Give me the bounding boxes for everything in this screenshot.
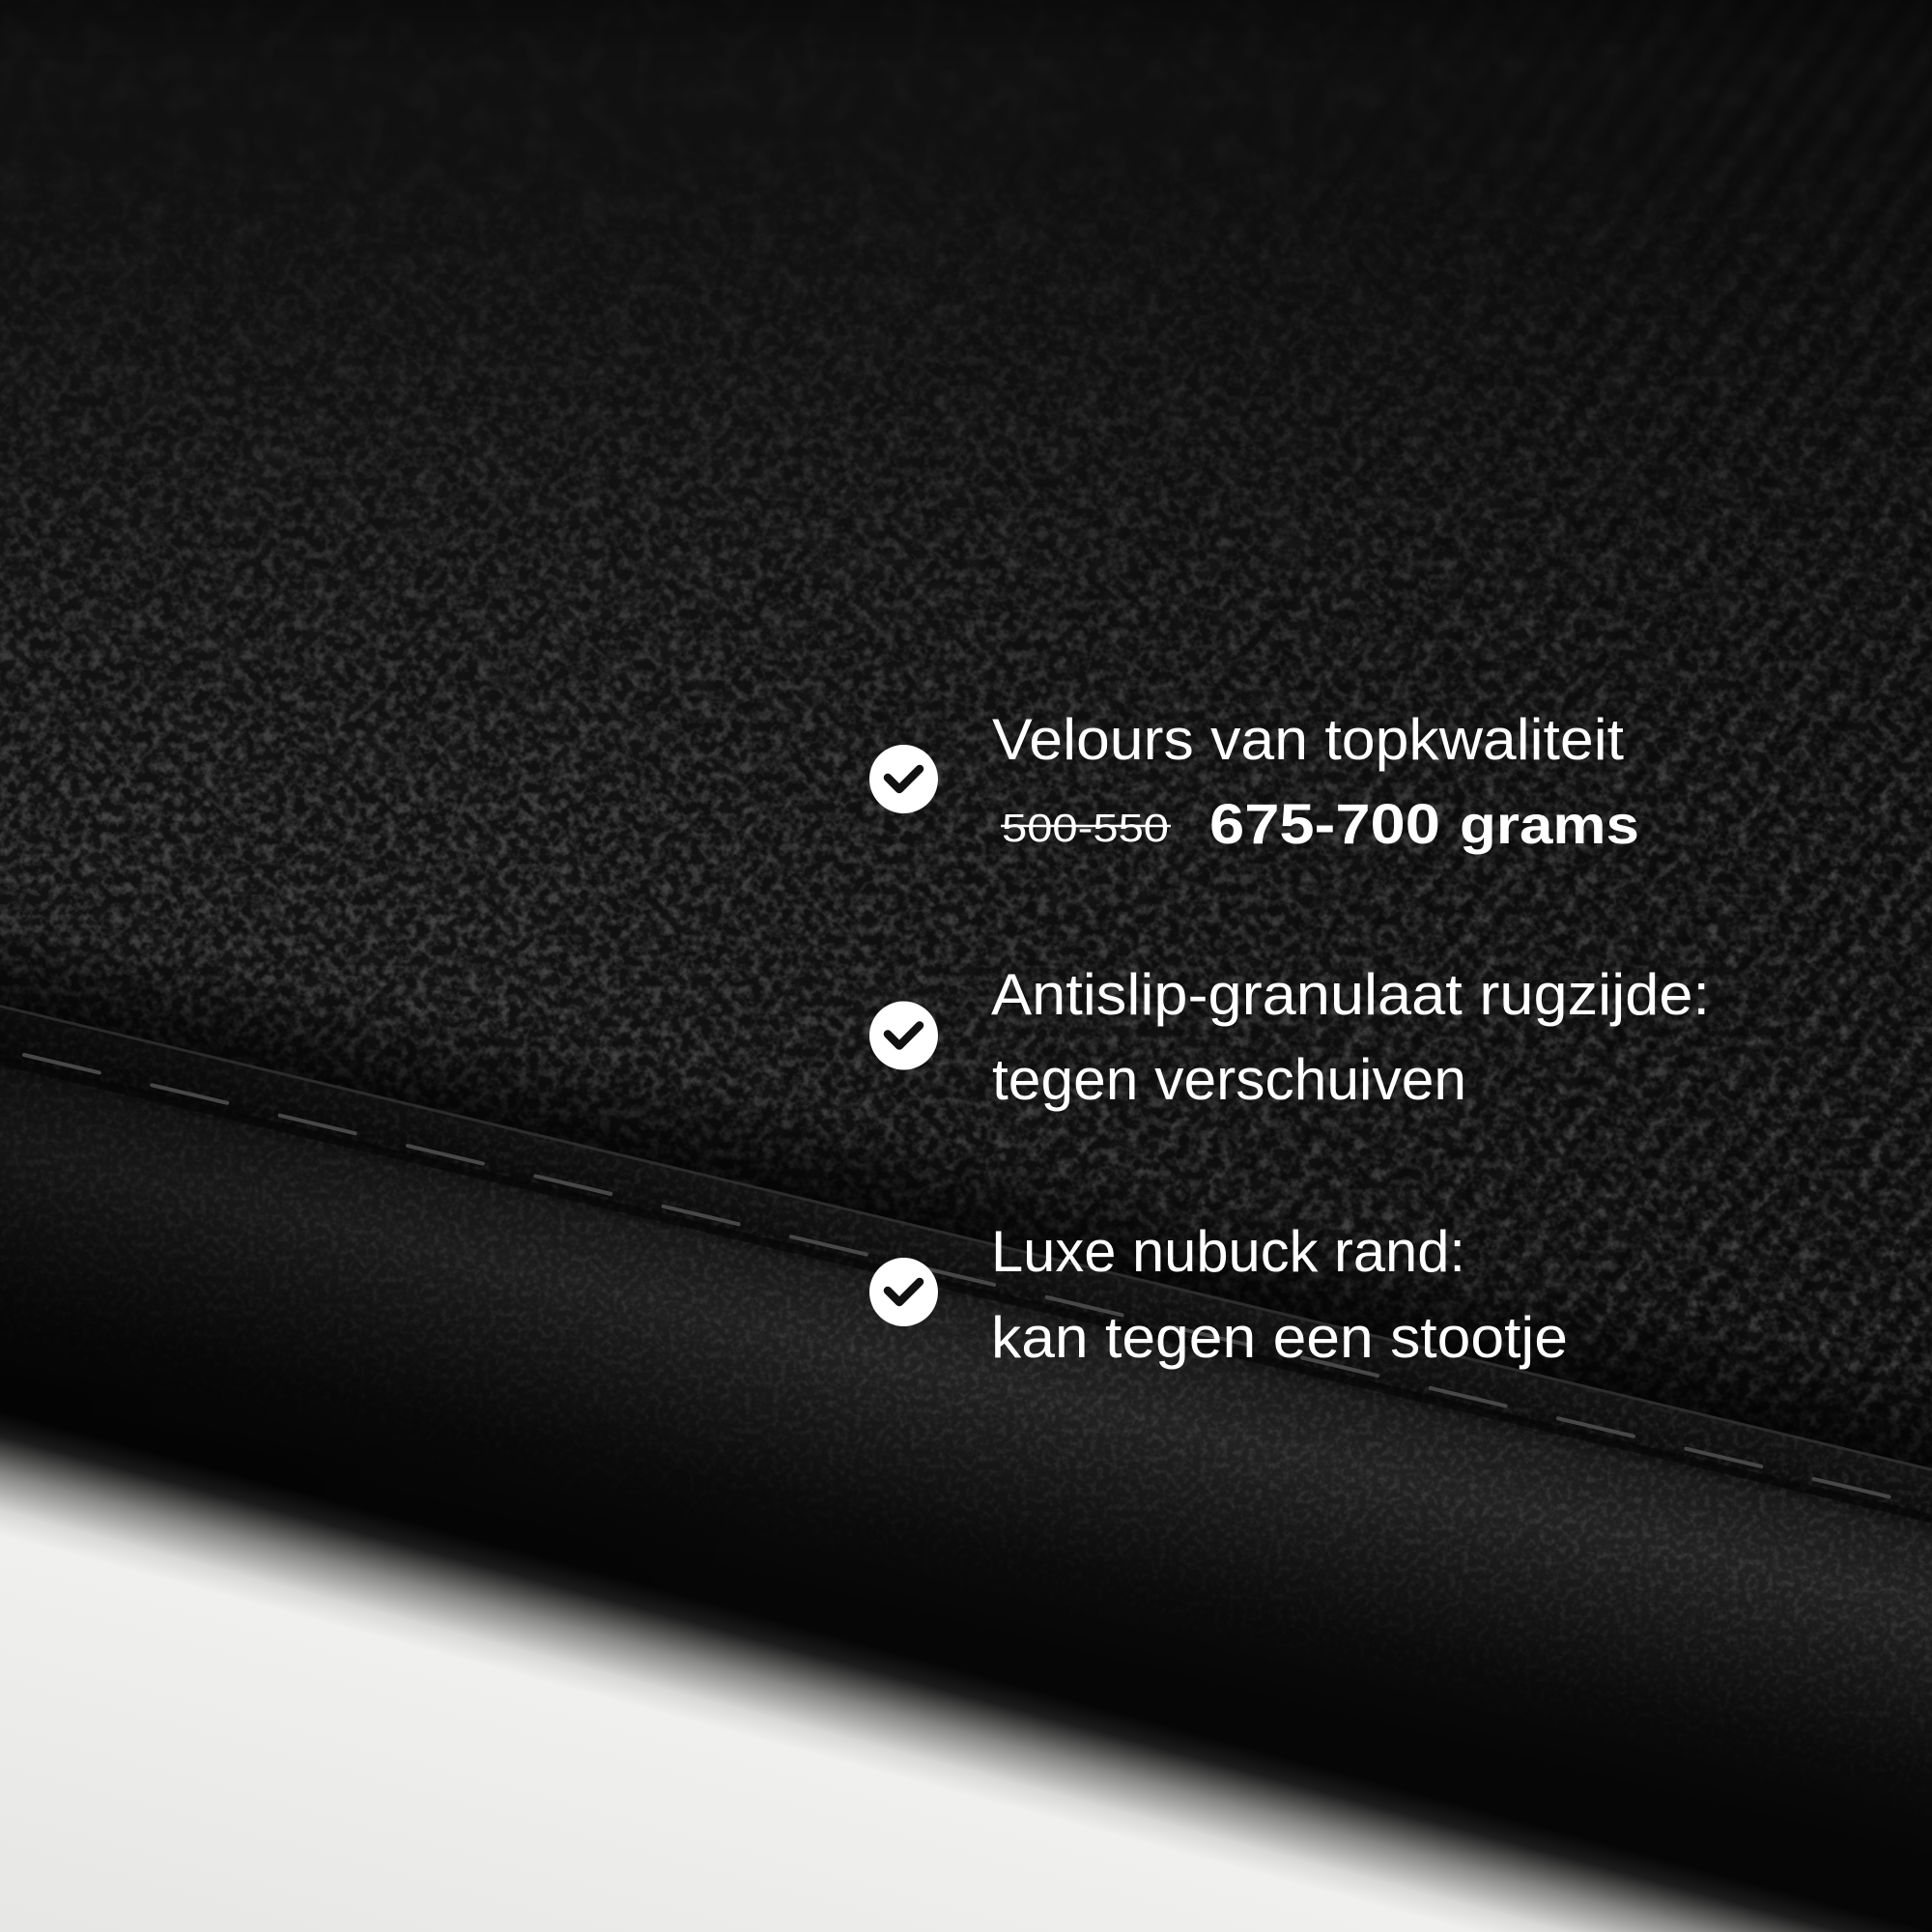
nubuck border strip with stitching (0, 1005, 1932, 1932)
feature 2: antislip (869, 962, 1710, 1112)
icon: check 3 (869, 1258, 938, 1326)
new weight: grams (1460, 794, 1639, 855)
feature list (869, 707, 1710, 1370)
text: luxe nubuck rand: Luxe nubuck rand: (991, 1219, 1465, 1284)
old weight struck through: 500-550 (1002, 806, 1169, 850)
stitching (24, 1055, 1932, 1507)
text: velours van topkwaliteit: Velours van topkwaliteit (992, 707, 1624, 772)
feature 1: velours weight (869, 707, 1639, 856)
text: kan tegen een stootje: kan tegen een stootje (991, 1305, 1568, 1370)
text: tegen verschuiven: tegen verschuiven (992, 1047, 1466, 1112)
background: dark carpet (0, 48, 1932, 1468)
icon: check 1 (869, 745, 938, 813)
shadow along the seam (0, 908, 1932, 1468)
new weight (1209, 793, 1639, 856)
feature 3: nubuck rand (869, 1219, 1568, 1370)
icon: check 2 (869, 1001, 938, 1070)
new weight: 675-700 (1209, 793, 1440, 856)
text: antislip-granulaat rugzijde: Antislip-granulaat rugzijde: (991, 962, 1710, 1027)
